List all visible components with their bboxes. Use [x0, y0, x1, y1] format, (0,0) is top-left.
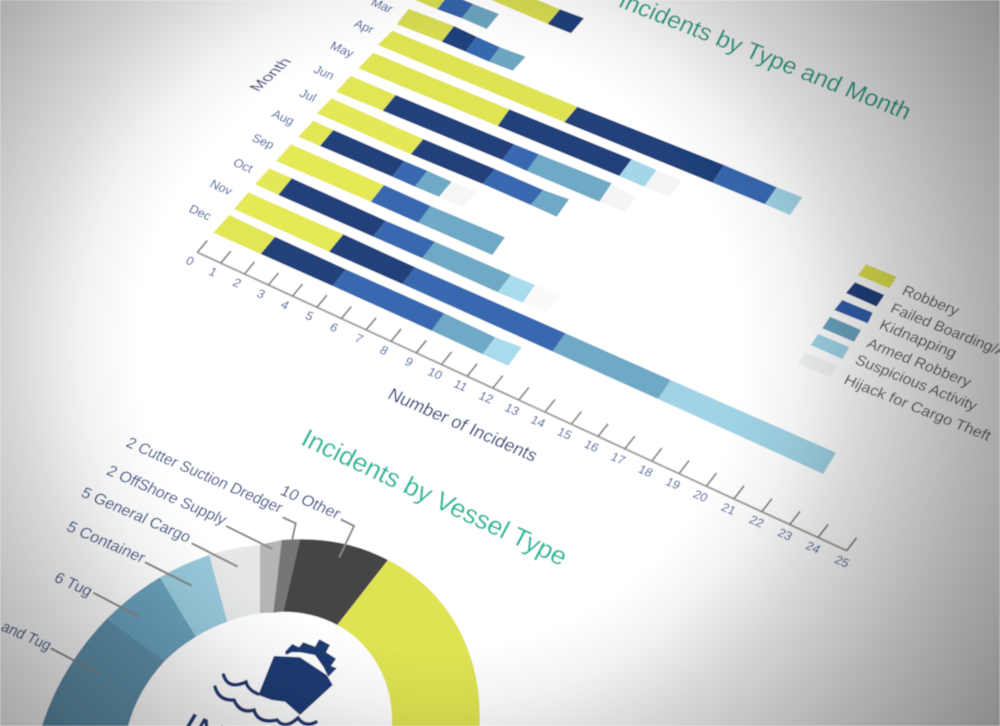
x axis tick labels: 23	[775, 526, 795, 543]
ship hull	[258, 656, 333, 715]
x axis tick labels: 19	[663, 475, 683, 492]
donut labels: 2 OffShore Supply	[103, 463, 229, 529]
slice: other	[283, 539, 388, 625]
month labels: Aug	[269, 107, 297, 128]
legend labels: Hijack for Cargo Theft	[841, 372, 994, 445]
x axis tick labels: 15	[555, 425, 574, 442]
x axis tick labels: 0	[183, 254, 197, 268]
bar row 10	[255, 168, 560, 313]
legend labels: Kidnapping	[876, 317, 960, 362]
donut labels	[0, 435, 344, 654]
month labels: May	[328, 39, 357, 61]
donut labels: 10 Other	[277, 483, 344, 523]
center disc	[73, 555, 443, 726]
x axis tick labels: 12	[476, 389, 496, 406]
x axis tick labels: 10	[425, 365, 445, 382]
title: Incidents by Vessel Type: Incidents by Vessel Type	[297, 423, 572, 571]
month labels: Apr	[352, 17, 376, 36]
bar row 6	[336, 76, 637, 212]
x axis tick labels: 14	[528, 413, 548, 430]
legend labels	[841, 283, 1000, 445]
x axis tick labels: 6	[327, 320, 341, 335]
ship superstructure	[285, 639, 337, 677]
stacked bar chart	[213, 0, 836, 474]
x axis tick labels: 4	[278, 298, 292, 312]
x axis tick labels: 9	[402, 355, 416, 369]
month labels: Oct	[231, 156, 256, 176]
axis title: Number of Incidents: Number of Incidents	[384, 384, 541, 465]
legend labels: Armed Robbery	[864, 335, 974, 391]
x axis tick labels: 24	[803, 539, 823, 556]
axis title: Month: Month	[246, 56, 295, 94]
bar row 4	[378, 31, 802, 215]
x axis tick labels: 22	[747, 513, 766, 530]
icon: ship on waves	[215, 639, 337, 725]
bar row 9	[276, 144, 505, 255]
x axis tick labels: 3	[254, 287, 268, 301]
donut labels: 5 General Cargo	[78, 485, 194, 546]
waves	[215, 675, 316, 725]
slice: cutter suction dredger	[273, 539, 300, 613]
x axis tick labels: 25	[832, 553, 852, 570]
month labels: Dec	[186, 202, 214, 223]
x axis with ticks	[197, 241, 857, 551]
month labels: Nov	[207, 177, 235, 198]
slice: container	[160, 555, 227, 637]
slice: barge and tug	[42, 618, 165, 726]
x axis tick labels: 13	[502, 401, 522, 418]
x axis tick labels: 8	[377, 343, 391, 358]
slice: largest yellow	[337, 560, 480, 726]
x axis tick labels: 2	[230, 276, 244, 290]
bar row 2	[415, 0, 499, 29]
donut labels: 2 Cutter Suction Dredger	[123, 435, 286, 517]
donut leader lines	[51, 517, 354, 673]
donut labels: 5 Container	[63, 519, 149, 567]
slice: general cargo	[209, 545, 260, 622]
legend labels: Suspicious Activity	[852, 352, 980, 415]
bar row 5	[358, 53, 682, 197]
legend labels: Robbery	[899, 283, 962, 319]
bar row 7	[317, 98, 569, 217]
x axis tick labels: 5	[303, 309, 316, 323]
x axis tick labels: 18	[636, 462, 655, 480]
bar row 1	[468, 0, 584, 33]
x axis tick labels: 7	[352, 331, 366, 346]
donut chart	[42, 539, 480, 726]
month labels: Jul	[297, 86, 319, 105]
slice: tug	[107, 577, 196, 661]
slice: offshore supply	[260, 540, 282, 613]
bar row 12	[213, 215, 522, 366]
bar row 3	[397, 9, 526, 71]
x axis tick labels: 16	[582, 437, 601, 455]
month labels	[186, 0, 395, 223]
bar row 11	[234, 192, 836, 474]
x axis tick labels	[183, 254, 852, 570]
month labels: Sep	[249, 131, 277, 152]
legend	[798, 264, 1000, 445]
x axis tick labels: 1	[206, 265, 220, 279]
month labels: Jun	[311, 63, 337, 83]
bar row 8	[298, 121, 477, 207]
x axis tick labels: 21	[719, 500, 738, 518]
legend swatches	[798, 264, 897, 377]
donut labels: 6 Tug	[51, 570, 95, 600]
x axis tick labels: 20	[691, 487, 710, 505]
x axis tick labels: 17	[608, 450, 628, 467]
x axis tick labels: 11	[451, 377, 470, 394]
